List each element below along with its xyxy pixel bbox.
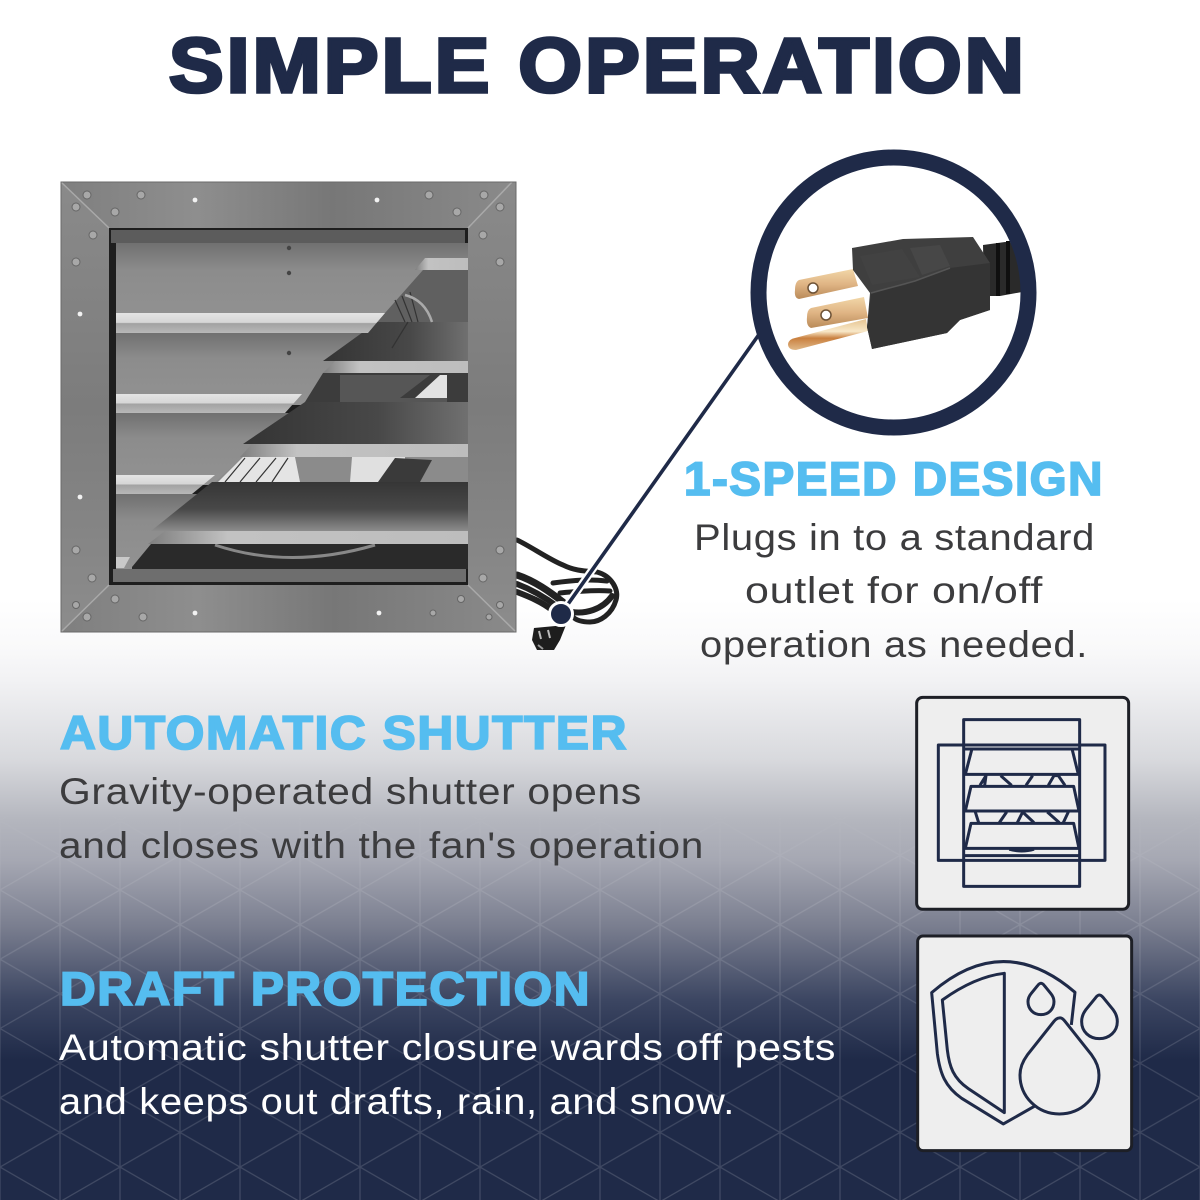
automatic shutter text block: and closes with the fan's operation [59,825,704,866]
product photo: shutter fan [61,182,617,650]
plug body [852,237,1022,349]
1-speed design text block: operation as needed. [700,624,1088,665]
small plug [532,625,566,650]
draft protection text block: DRAFT PROTECTION [60,962,591,1015]
1-speed design text block: outlet for on/off [745,570,1043,611]
metal frame [61,182,516,632]
callout leader line [550,333,760,626]
draft protection text block: and keeps out drafts, rain, and snow. [59,1081,735,1122]
1-speed design text block: 1-SPEED DESIGN [684,452,1104,505]
draft protection text block: Automatic shutter closure wards off pests [59,1027,836,1068]
icon: shutter [917,697,1129,909]
shutter opening [109,228,468,585]
callout circle: plug close-up [758,158,1028,428]
automatic shutter text block: Gravity-operated shutter opens [59,771,642,812]
automatic shutter text block: AUTOMATIC SHUTTER [60,706,628,759]
shutter highlight bars [116,258,468,568]
power cord [517,540,617,622]
1-speed design text block [684,452,1104,665]
title: SIMPLE OPERATION [169,23,1027,109]
icon: draft protection shield and drops [918,936,1132,1151]
1-speed design text block: Plugs in to a standard [694,517,1095,558]
plug prongs [788,269,868,350]
open blades and fan behind shutter [132,270,468,569]
draft protection text block [59,962,836,1122]
automatic shutter text block [59,706,704,866]
